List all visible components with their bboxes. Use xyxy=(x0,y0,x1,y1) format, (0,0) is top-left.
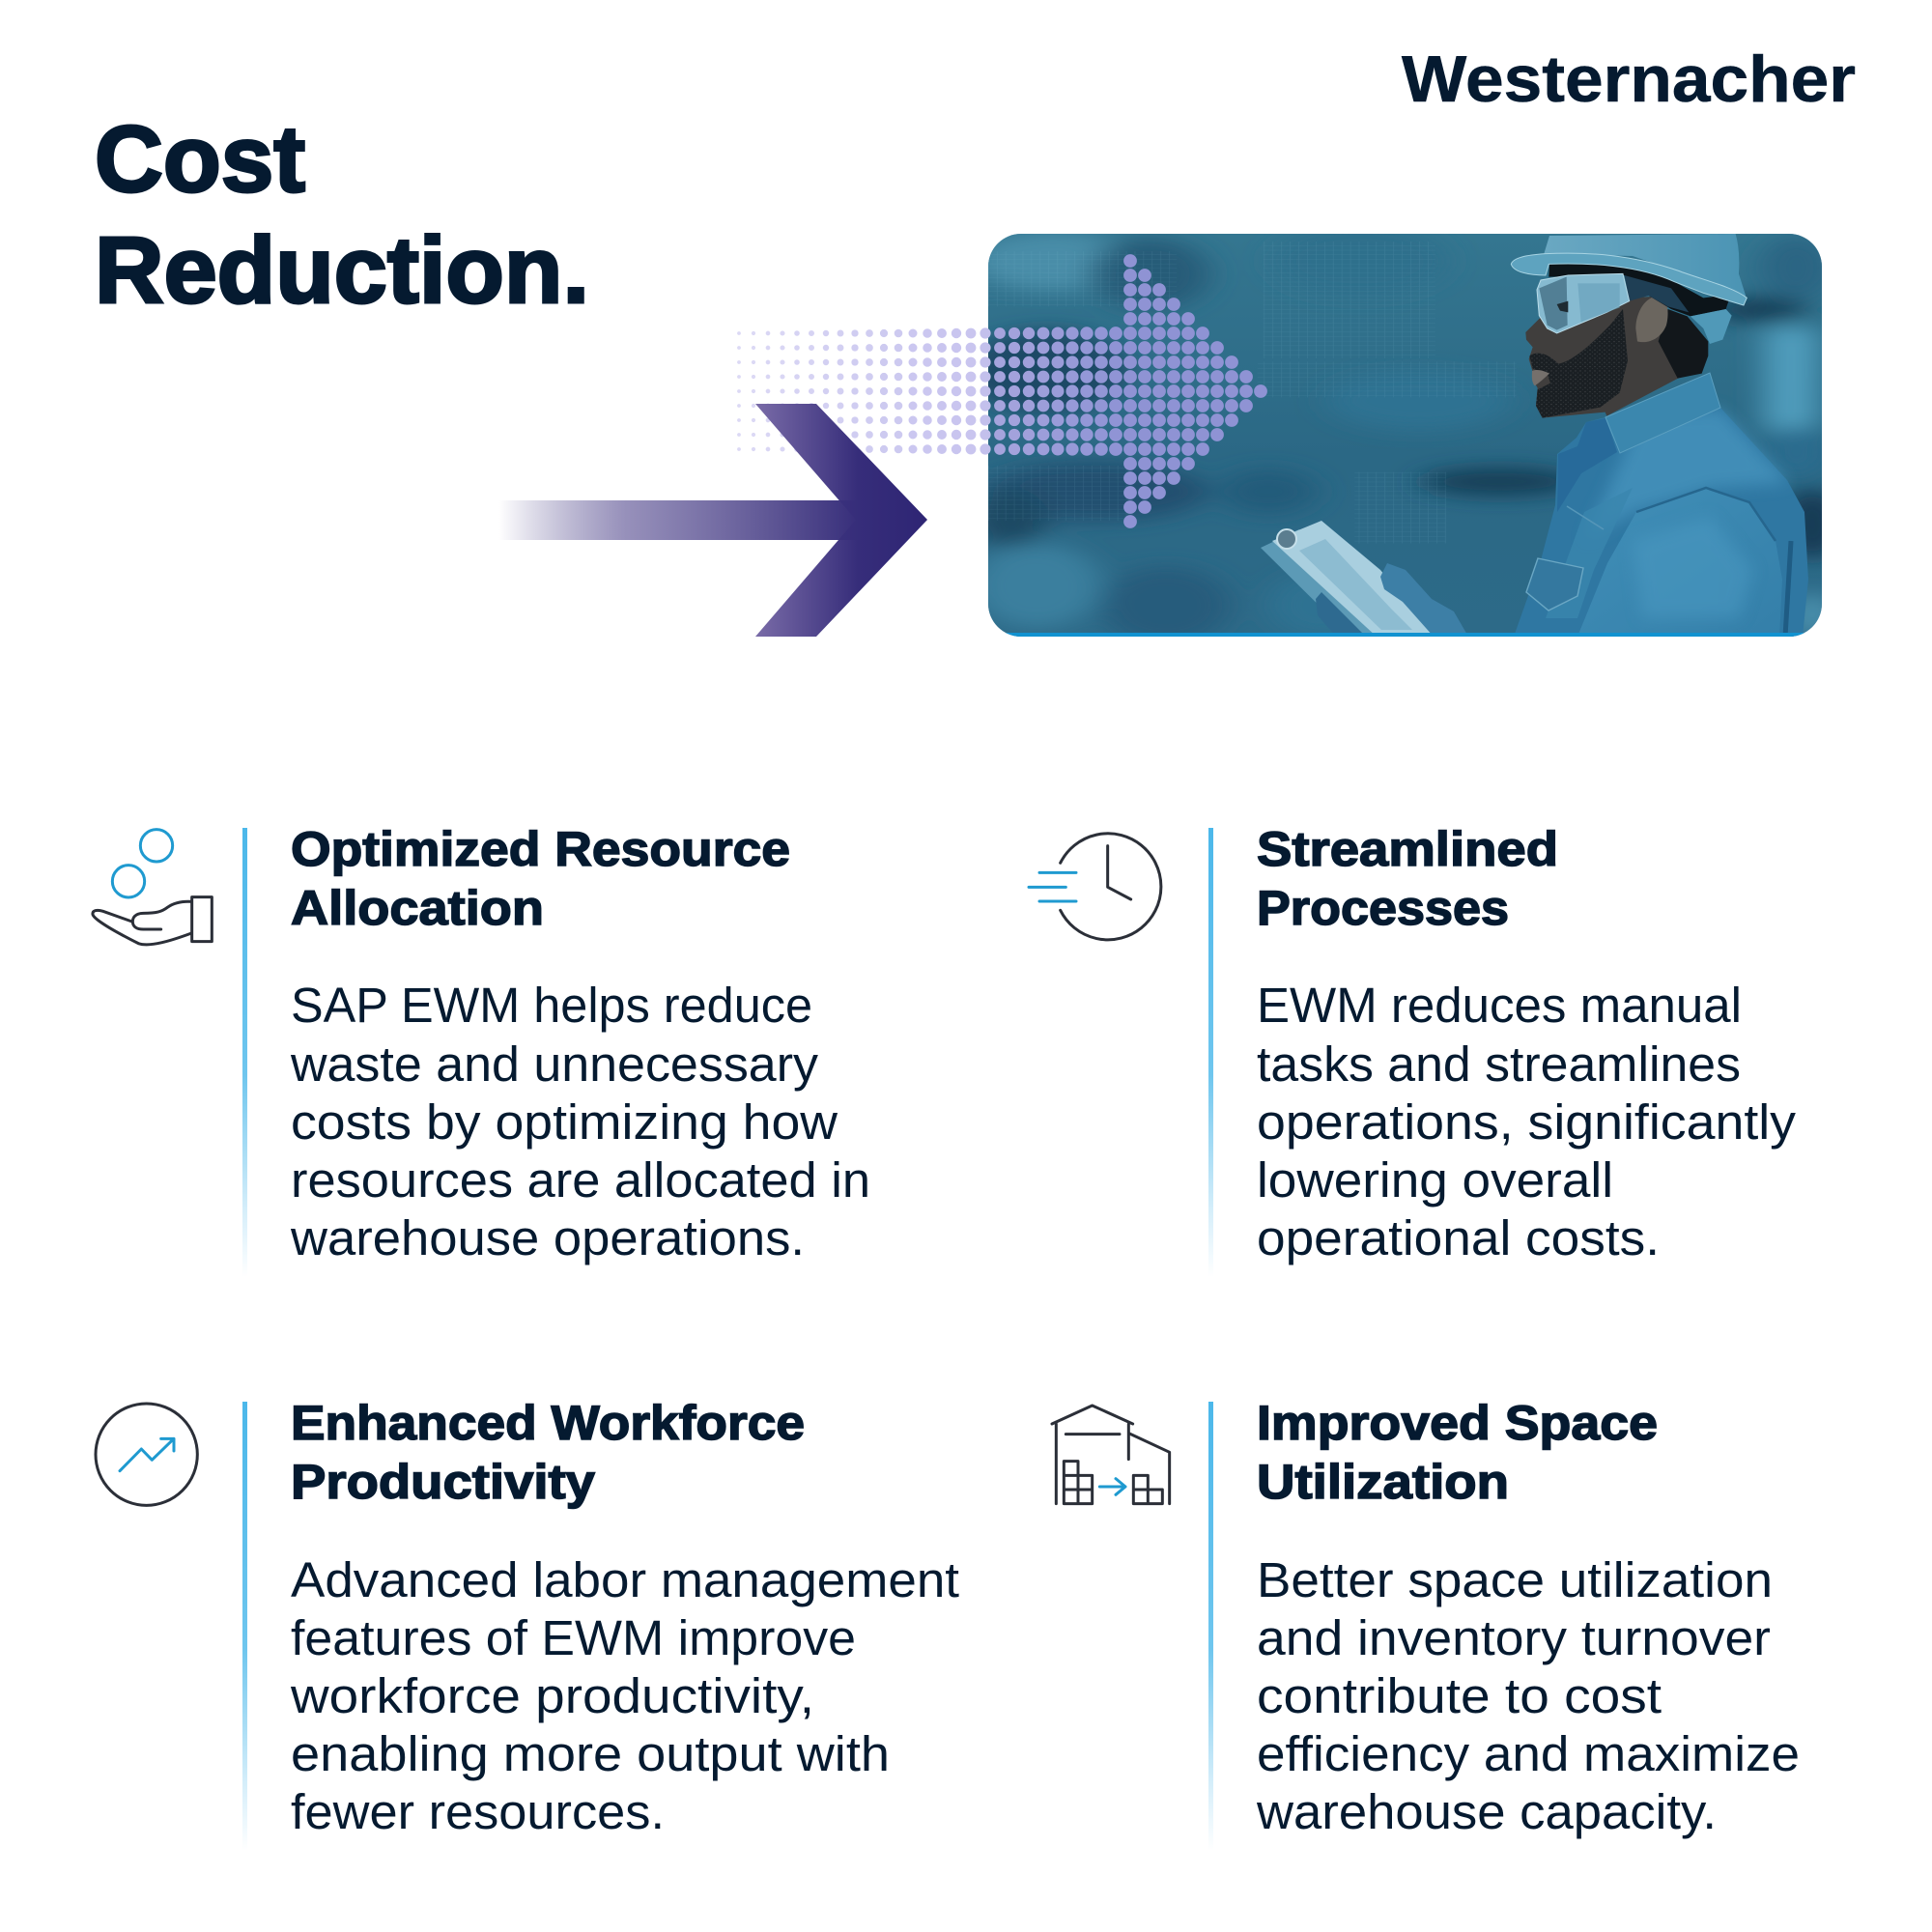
heading: Streamlined xyxy=(1257,822,1558,876)
divider xyxy=(1208,1402,1213,1851)
body text: tasks and streamlines xyxy=(1257,1037,1741,1092)
body text: fewer resources. xyxy=(291,1784,665,1839)
shirt placket xyxy=(1557,418,1617,512)
worker shirt xyxy=(1514,373,1808,637)
dot arrow xyxy=(739,261,1261,522)
divider xyxy=(242,1402,247,1851)
body text: enabling more output with xyxy=(291,1726,890,1781)
body text: lowering overall xyxy=(1257,1152,1613,1208)
photo background blur xyxy=(967,225,1845,644)
icon: coins over hand xyxy=(93,830,212,945)
goggle strap xyxy=(1625,275,1689,312)
body text: and inventory turnover xyxy=(1257,1610,1771,1665)
heading: Utilization xyxy=(1257,1455,1509,1509)
body text xyxy=(290,1552,959,1839)
safety goggles xyxy=(1537,273,1630,333)
body text: operations, significantly xyxy=(1257,1094,1797,1150)
data grid overlay xyxy=(988,242,1517,544)
divider xyxy=(242,828,247,1277)
clipboard with paper xyxy=(1261,521,1435,637)
hard hat xyxy=(1511,234,1747,305)
body text: contribute to cost xyxy=(1257,1668,1662,1723)
icon: warehouse with boxes xyxy=(1052,1406,1170,1504)
icon: fast clock xyxy=(1029,834,1161,940)
title: Reduction. xyxy=(95,217,589,323)
title: Cost xyxy=(95,106,305,212)
divider xyxy=(1208,828,1213,1277)
heading xyxy=(291,822,790,935)
worker beard xyxy=(1529,309,1628,418)
gradient arrow xyxy=(498,404,927,637)
worker ear xyxy=(1635,297,1668,342)
panel: improved space utilization xyxy=(1052,1396,1800,1851)
body text: Better space utilization xyxy=(1257,1552,1773,1607)
body text: waste and unnecessary xyxy=(290,1037,819,1092)
body text: warehouse operations. xyxy=(290,1210,805,1265)
body text: resources are allocated in xyxy=(291,1152,870,1208)
body text: EWM reduces manual xyxy=(1257,978,1742,1033)
shirt collar xyxy=(1605,373,1720,453)
body text: features of EWM improve xyxy=(291,1610,856,1665)
heading xyxy=(1257,822,1558,935)
shirt pocket xyxy=(1526,558,1583,611)
heading: Productivity xyxy=(291,1455,595,1509)
body text: costs by optimizing how xyxy=(291,1094,838,1150)
heading: Enhanced Workforce xyxy=(291,1396,805,1450)
heading: Processes xyxy=(1257,881,1509,935)
heading: Allocation xyxy=(291,881,544,935)
worker hair xyxy=(1659,309,1708,379)
panel: enhanced workforce productivity xyxy=(96,1396,959,1851)
worker lips xyxy=(1532,370,1549,385)
helmet side xyxy=(1690,309,1732,344)
photo bottom edge xyxy=(988,633,1822,637)
body text xyxy=(1256,1552,1800,1839)
body text: Advanced labor management xyxy=(291,1552,959,1607)
worker neck and face xyxy=(1525,297,1684,418)
body text: warehouse capacity. xyxy=(1256,1784,1717,1839)
heading xyxy=(291,1396,805,1509)
gloved hand xyxy=(1316,563,1468,637)
body text: efficiency and maximize xyxy=(1257,1726,1800,1781)
logo: Westernacher: Westernacher xyxy=(1402,43,1856,116)
heading xyxy=(1257,1396,1658,1509)
panel: streamlined processes xyxy=(1029,822,1797,1277)
panel: optimized resource allocation xyxy=(93,822,870,1277)
title xyxy=(95,106,589,323)
heading: Optimized Resource xyxy=(291,822,790,876)
helmet strap band xyxy=(1548,263,1731,316)
body text xyxy=(1257,978,1797,1265)
body text: SAP EWM helps reduce xyxy=(291,978,812,1033)
hero photo: warehouse worker with clipboard xyxy=(967,225,1845,644)
body text: operational costs. xyxy=(1257,1210,1660,1265)
body text: workforce productivity, xyxy=(290,1668,814,1723)
heading: Improved Space xyxy=(1257,1396,1658,1450)
icon: growth chart in circle xyxy=(96,1404,197,1505)
body text xyxy=(290,978,870,1265)
